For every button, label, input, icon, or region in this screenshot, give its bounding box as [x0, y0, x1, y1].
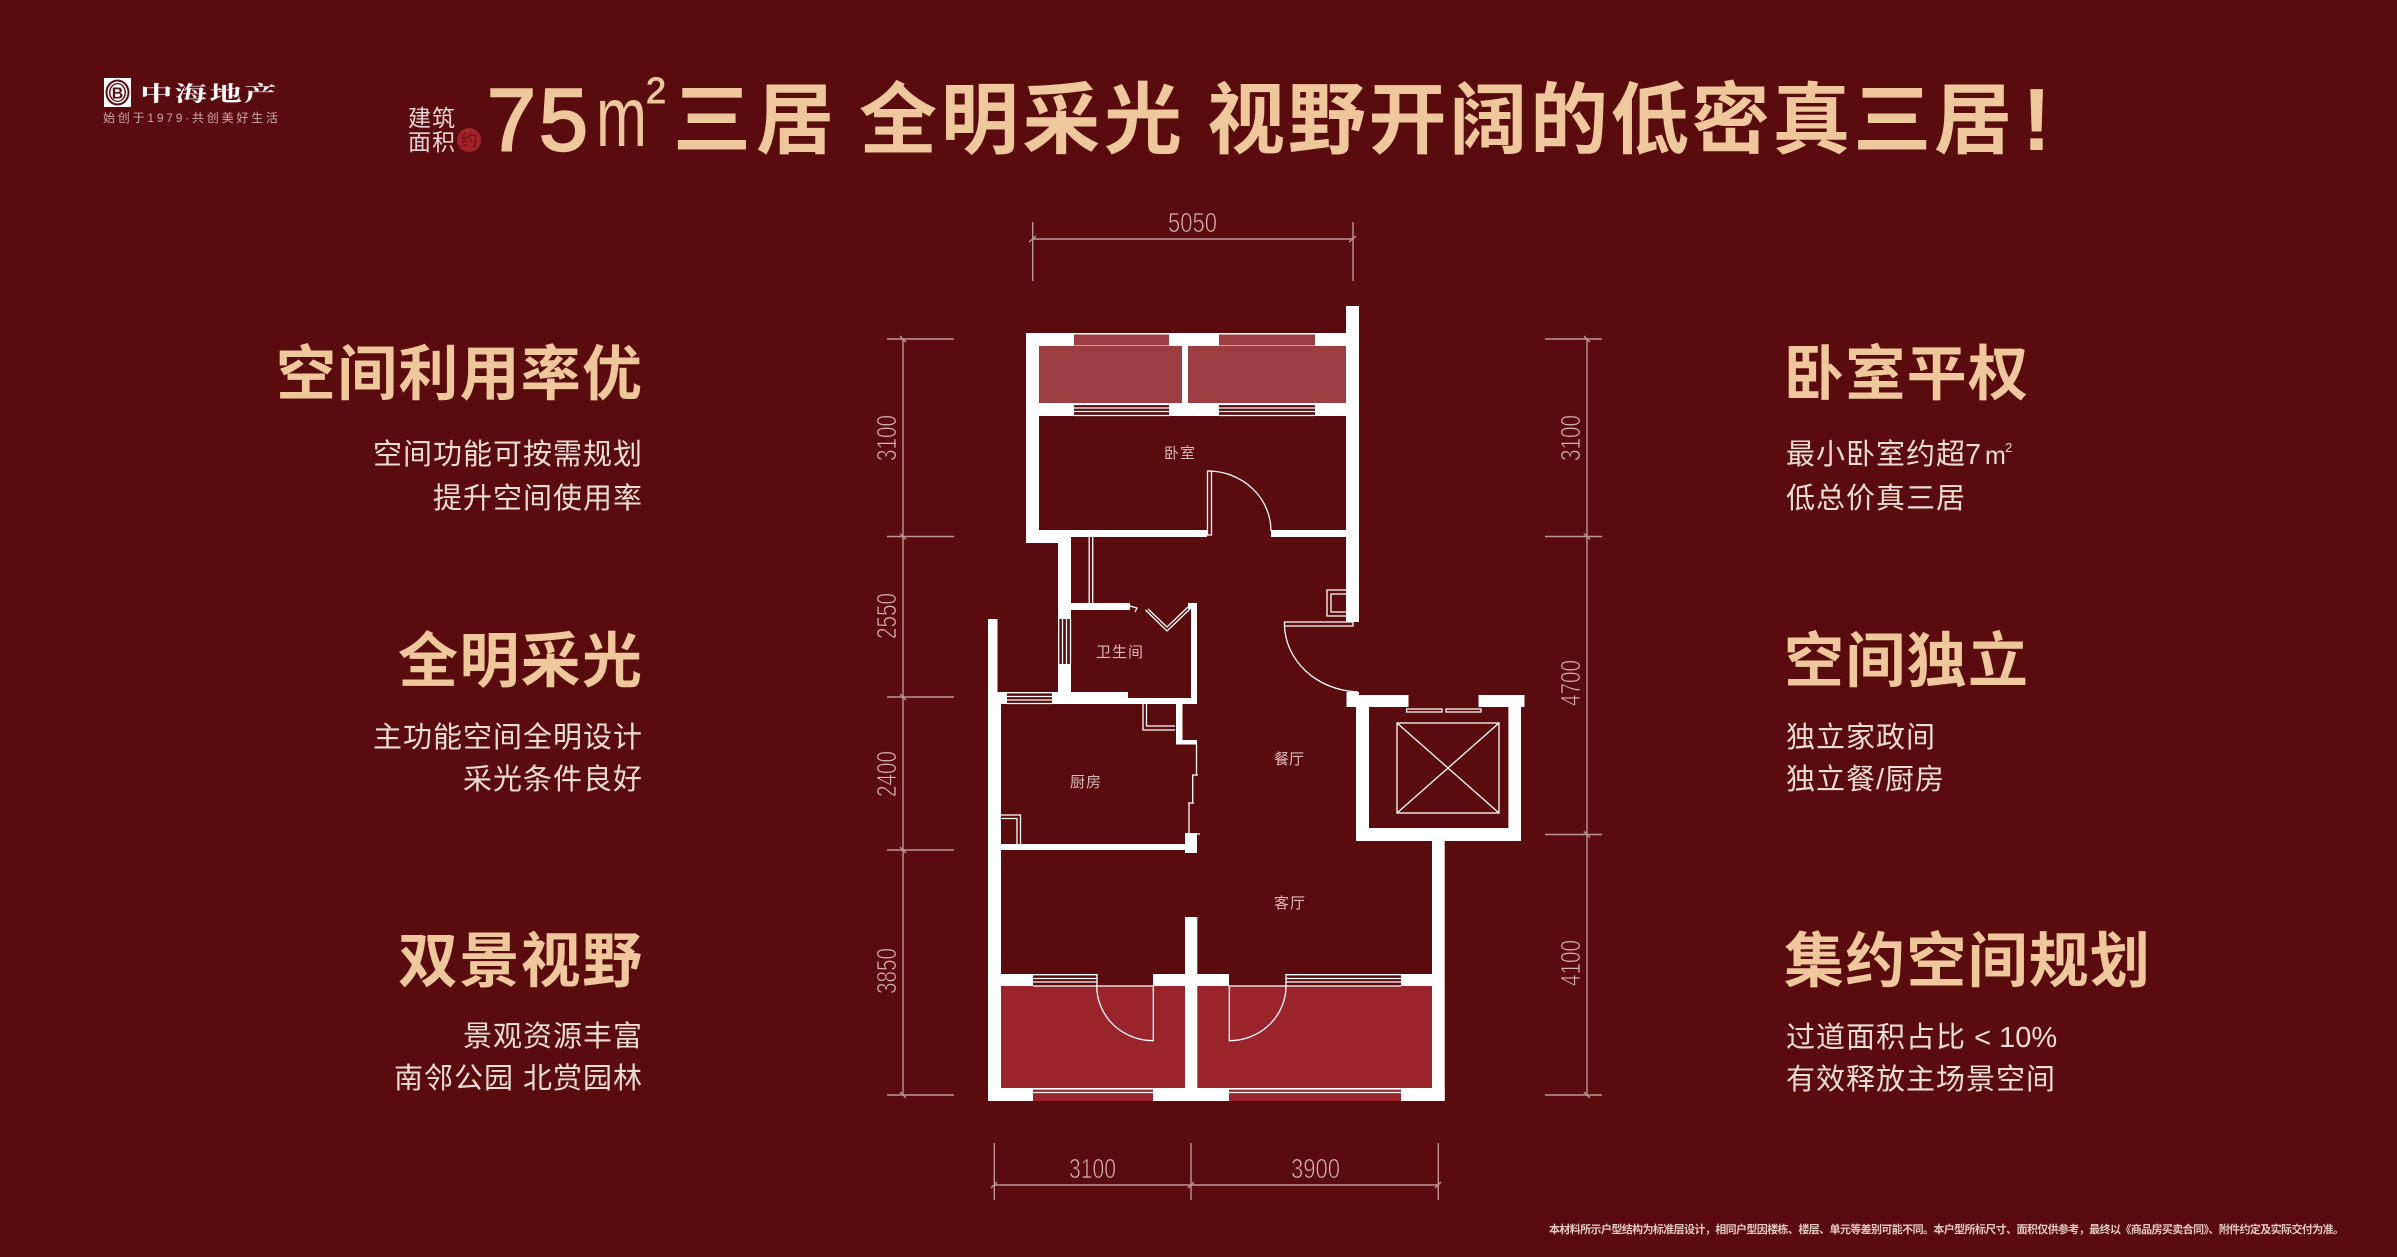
feature: space utilisation: 提升空间使用率 — [433, 482, 643, 515]
feature: bedrooms: 最小卧室约超 — [1786, 439, 1966, 471]
feature: full daylight: 采光条件良好 — [463, 763, 643, 796]
feature: space utilisation: 空间功能可按需规划 — [373, 438, 643, 471]
area number: 75 — [487, 70, 588, 169]
logo — [103, 76, 278, 125]
left dimensions: 2400 — [871, 751, 902, 797]
left dimensions: 3850 — [871, 948, 902, 994]
top dimension: 5050 — [1168, 207, 1217, 238]
right dimensions: 4100 — [1555, 940, 1586, 986]
seal: 约 — [460, 131, 478, 150]
area number: 2 — [646, 70, 666, 111]
room label: bathroom: 卫生间 — [1096, 644, 1143, 661]
seal — [457, 128, 481, 152]
right dimensions: 4700 — [1555, 660, 1586, 706]
top dimension — [1029, 207, 1356, 281]
right dimensions — [1545, 336, 1602, 1098]
area label: 建筑 — [408, 105, 455, 131]
area label — [408, 105, 455, 155]
left dimensions — [871, 336, 954, 1098]
room label: living: 客厅 — [1274, 895, 1305, 912]
feature: compact planning: 有效释放主场景空间 — [1786, 1063, 2056, 1096]
bottom dimensions: 3900 — [1291, 1153, 1340, 1184]
disclaimer: 本材料所示户型结构为标准层设计，相同户型因楼栋、楼层、单元等差别可能不同。本户型所标尺寸、面积仅供参考，最终以《商品房买卖合同》、附件约定及实际交付为准。 — [1549, 1222, 2344, 1236]
feature: compact planning — [1784, 928, 2150, 1096]
feature: bedrooms — [1784, 341, 2028, 515]
feature: double views: 双景视野 — [398, 928, 642, 995]
shafts — [1001, 590, 1346, 844]
logo name: 中海地产 — [140, 76, 276, 107]
headline: 三居 — [673, 76, 834, 164]
feature: full daylight — [373, 628, 643, 796]
feature: independent space: 空间独立 — [1784, 628, 2028, 695]
area number: m — [596, 69, 647, 164]
doors — [1089, 471, 1358, 1041]
windows — [1007, 334, 1401, 1101]
headline: 全明采光 — [859, 76, 1182, 164]
feature: compact planning: 过道面积占比 < 10% — [1786, 1021, 2057, 1054]
room label: bedroom: 卧室 — [1164, 445, 1195, 462]
bottom dimensions: 3100 — [1069, 1153, 1116, 1184]
feature: bedrooms: 低总价真三居 — [1786, 482, 1966, 515]
bottom dimensions — [991, 1143, 1441, 1200]
balcony fills — [1001, 346, 1432, 1088]
feature: double views: 南邻公园 北赏园林 — [394, 1062, 643, 1095]
feature: space utilisation: 空间利用率优 — [276, 341, 642, 408]
right dimensions: 3100 — [1555, 415, 1586, 461]
feature: bedrooms: 卧室平权 — [1784, 341, 2028, 408]
feature: independent space: 独立家政间 — [1786, 721, 1936, 754]
walls — [988, 306, 1524, 1101]
room label: kitchen: 厨房 — [1070, 774, 1101, 791]
headline: 视野开阔的低密真三居 — [1207, 76, 2012, 164]
feature: bedrooms: 7 — [1965, 439, 1982, 471]
feature: double views: 景观资源丰富 — [463, 1020, 643, 1053]
feature: double views — [394, 928, 643, 1095]
area label: 面积 — [408, 129, 455, 155]
room label: dining: 餐厅 — [1274, 751, 1304, 768]
logo slogan: 始创于1979·共创美好生活 — [103, 111, 278, 125]
elevator — [1397, 709, 1499, 813]
feature: full daylight: 全明采光 — [398, 628, 642, 695]
feature: bedrooms: 2 — [2005, 440, 2013, 455]
feature: independent space: 独立餐/厨房 — [1786, 763, 1945, 796]
logo emblem — [104, 78, 131, 107]
title — [408, 69, 2051, 169]
feature: bedrooms: m — [1985, 442, 2007, 470]
feature: full daylight: 主功能空间全明设计 — [373, 721, 643, 754]
area number — [487, 69, 666, 169]
left dimensions: 3100 — [871, 415, 902, 461]
feature: compact planning: 集约空间规划 — [1784, 928, 2150, 995]
headline: ! — [2022, 70, 2051, 169]
left dimensions: 2550 — [871, 593, 902, 639]
feature: space utilisation — [276, 341, 643, 515]
headline — [673, 70, 2051, 169]
floor plan — [988, 306, 1524, 1101]
feature: independent space — [1784, 628, 2028, 796]
logo emblem: B — [112, 86, 123, 102]
